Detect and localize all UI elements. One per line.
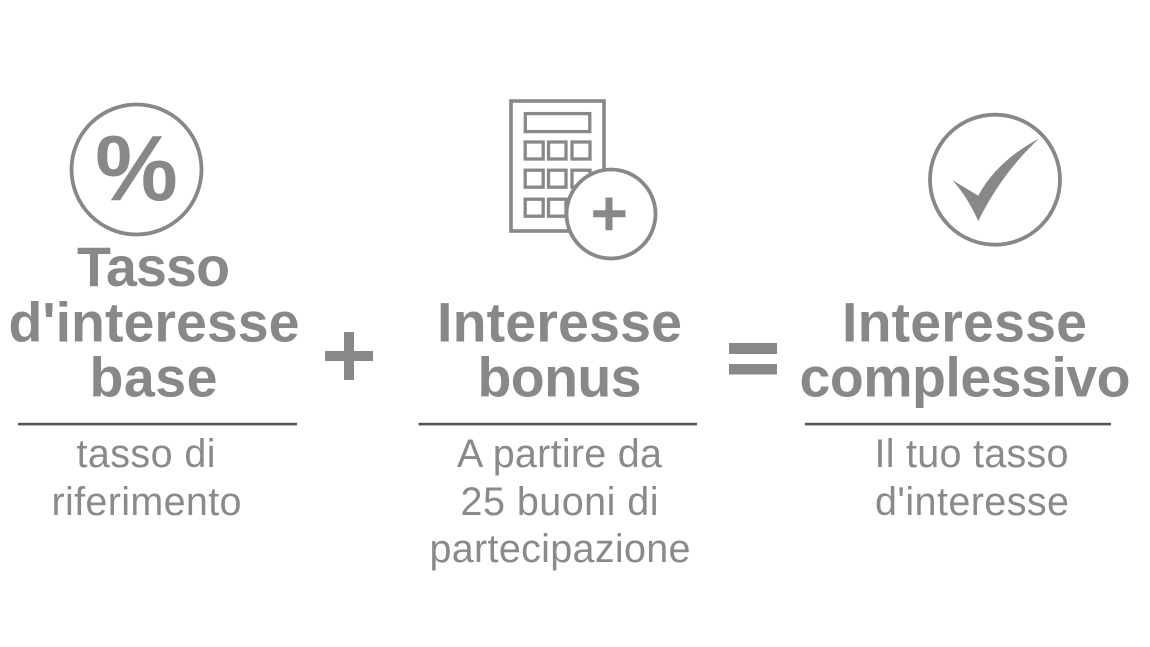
divider line <box>805 423 1111 425</box>
text: Il tuo tasso d'interesse <box>874 432 1069 524</box>
plus operator <box>325 332 373 380</box>
heading: Interesse complessivo <box>800 292 1130 409</box>
text: A partire da 25 buoni di partecipazione: 25 buoni di <box>460 480 658 524</box>
text: Il tuo tasso d'interesse: Il tuo tasso <box>874 432 1068 476</box>
icon: percent in circle <box>72 104 202 234</box>
text: A partire da 25 buoni di partecipazione: partecipazione <box>430 527 690 571</box>
heading: Tasso d'interesse base: Tasso <box>77 236 230 298</box>
heading: Interesse bonus: Interesse <box>437 292 682 354</box>
divider line <box>418 423 697 425</box>
icon: check mark in circle <box>930 115 1060 245</box>
heading: Interesse complessivo: Interesse <box>842 292 1087 354</box>
equals operator <box>729 343 777 374</box>
text: A partire da 25 buoni di partecipazione: A partire da <box>457 432 662 476</box>
text: tasso di riferimento: riferimento <box>52 480 242 524</box>
heading: Interesse bonus: bonus <box>478 347 642 409</box>
heading: Interesse bonus <box>437 292 682 409</box>
text: tasso di riferimento <box>52 432 242 524</box>
heading: Tasso d'interesse base: base <box>90 347 218 409</box>
text: A partire da 25 buoni di partecipazione <box>430 432 690 571</box>
heading: Tasso d'interesse base: d'interesse <box>8 292 300 354</box>
panel: total interest <box>800 115 1130 524</box>
text: tasso di riferimento: tasso di <box>76 432 216 476</box>
text: Il tuo tasso d'interesse: d'interesse <box>875 480 1069 524</box>
icon: percent in circle: % <box>95 116 178 220</box>
heading: Interesse complessivo: complessivo <box>800 347 1130 409</box>
panel: base interest rate <box>8 104 300 524</box>
icon: calculator with plus badge <box>511 101 656 258</box>
panel: bonus interest <box>418 101 697 571</box>
divider line <box>18 423 297 425</box>
heading: Tasso d'interesse base <box>8 236 300 409</box>
